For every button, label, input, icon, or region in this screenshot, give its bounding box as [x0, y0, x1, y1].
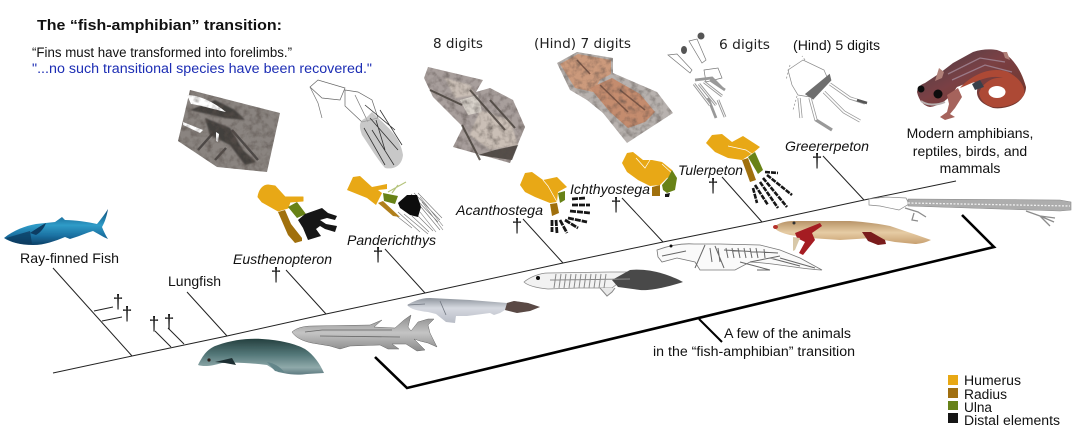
distal elements: [298, 208, 337, 240]
branch: ray-finned fish: [53, 268, 132, 356]
legend: [948, 373, 1060, 428]
label: Tulerpeton: Tulerpeton: [678, 162, 743, 178]
ulna: [288, 202, 306, 218]
humerus: [258, 185, 303, 211]
limb: Acanthostega: [520, 172, 590, 233]
icon: Tulerpeton model: [773, 221, 931, 255]
label: hind 7 digits: (Hind) 7 digits: [534, 37, 631, 52]
extinction daggers: †: [149, 314, 159, 335]
fossil photo: Eusthenopteron fin: [178, 90, 280, 172]
extinction daggers: †: [708, 176, 718, 197]
bracket connector: [699, 319, 722, 342]
quote: fins: “Fins must have transformed into forelimbs.”: [32, 45, 292, 60]
icon: lungfish: [198, 339, 324, 375]
extinction daggers: †: [164, 312, 174, 333]
fossil drawing: Tulerpeton bones: [668, 32, 725, 118]
branches: extinct side groups: [94, 307, 184, 347]
extinction daggers: †: [113, 292, 123, 313]
legend: humerus: Humerus: [964, 373, 1021, 388]
icon: Eusthenopteron fish: [292, 315, 437, 351]
main trunk line: [53, 181, 956, 373]
icon: Greererpeton skeleton: [869, 197, 1071, 226]
branch: Panderichthys: [385, 249, 425, 293]
label: bracket caption: A few of the animals: [724, 326, 851, 341]
limb: Eusthenopteron: [258, 185, 337, 243]
icon: tuna: [4, 209, 108, 245]
extinction daggers: †: [611, 195, 621, 216]
humerus: [622, 152, 675, 186]
quote: no transitional species: "...no such transitional species have been recovered.": [32, 61, 372, 76]
ulna: [383, 193, 398, 204]
icon: salamander: [917, 49, 1026, 120]
branch: Eusthenopteron: [286, 270, 326, 314]
radius: [652, 185, 660, 196]
icon: Acanthostega skeleton: [524, 270, 683, 296]
label: ray-finned fish: Ray-finned Fish: [20, 250, 119, 266]
branch: Greererpeton: [823, 156, 864, 200]
extinction daggers: †: [271, 265, 281, 286]
digits: [753, 172, 792, 208]
fossil photo: Acanthostega: [424, 67, 525, 163]
ulna: [558, 191, 565, 203]
extinction daggers: [113, 151, 822, 335]
label: hind 5 digits: (Hind) 5 digits: [793, 38, 880, 53]
radius: [742, 158, 756, 182]
fin rays: [389, 193, 443, 234]
extinction daggers: †: [122, 304, 132, 325]
icon: Ichthyostega skeleton: [657, 244, 822, 270]
title: The “fish-amphibian” transition:: [37, 18, 282, 34]
ulna: [748, 152, 763, 174]
humerus: [347, 176, 387, 205]
label: modern groups: mammals: [940, 160, 1000, 176]
humerus: [706, 134, 760, 160]
label: 8 digits: 8 digits: [433, 37, 483, 52]
branch: Acanthostega: [523, 219, 563, 263]
bracket for transition animals: [375, 215, 994, 388]
radius: [378, 201, 400, 217]
label: 6 digits: 6 digits: [719, 38, 770, 53]
limb: Ichthyostega: [622, 152, 677, 197]
legend: distal elements: Distal elements: [964, 413, 1060, 428]
limb: Tulerpeton: [706, 134, 792, 208]
icon: Panderichthys fish: [407, 298, 540, 323]
fossil photo: Ichthyostega: [557, 52, 673, 143]
fossil drawing: Greererpeton hind foot: [786, 56, 867, 130]
branch: Tulerpeton: [722, 177, 762, 222]
branch: Ichthyostega: [622, 198, 663, 242]
extinction daggers: †: [512, 216, 522, 237]
phylogenetic tree: [53, 156, 956, 373]
distal elements: [398, 195, 421, 217]
branch: lungfish: [187, 292, 227, 336]
humerus: [520, 172, 567, 203]
ulna: [662, 170, 677, 193]
digits: [552, 198, 590, 233]
label: Acanthostega: Acanthostega: [455, 202, 543, 218]
label: modern groups: reptiles, birds, and: [913, 143, 1027, 159]
label: bracket caption: in the “fish-amphibian” transition: [653, 344, 855, 359]
radius: [278, 210, 302, 243]
extinction daggers: †: [812, 151, 822, 172]
label: Ichthyostega: Ichthyostega: [570, 181, 650, 197]
label: Eusthenopteron: Eusthenopteron: [233, 251, 332, 267]
label: Panderichthys: Panderichthys: [347, 232, 436, 248]
distal element: [665, 193, 670, 197]
fossil drawing: Panderichthys fin: [310, 80, 403, 168]
radius: [550, 203, 559, 216]
label: Greererpeton: Greererpeton: [785, 138, 869, 154]
limb: Panderichthys: [347, 176, 443, 234]
label: lungfish: Lungfish: [168, 273, 221, 289]
label: modern groups: Modern amphibians,: [907, 125, 1033, 141]
legend: ulna: Ulna: [964, 400, 992, 415]
extinction daggers: †: [373, 245, 383, 266]
legend: radius: Radius: [964, 387, 1007, 402]
